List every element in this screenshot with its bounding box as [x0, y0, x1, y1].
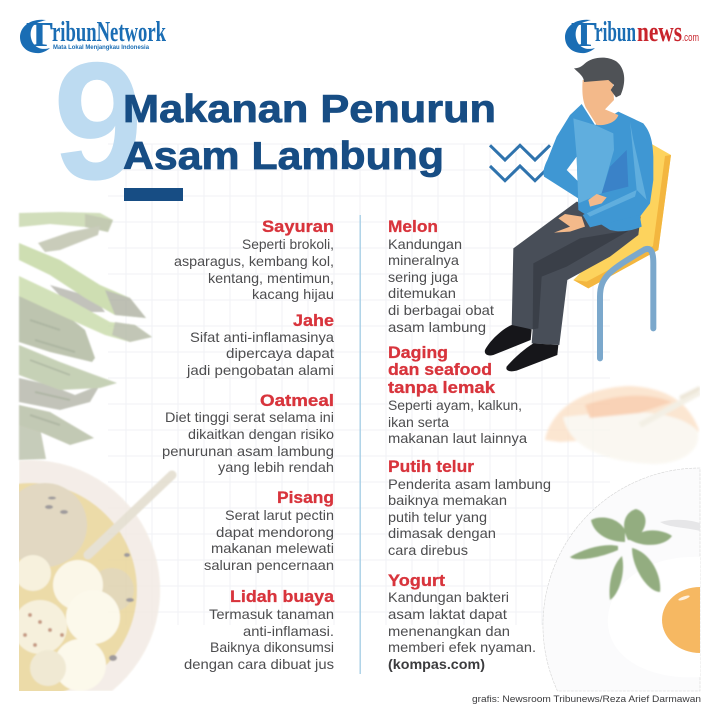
item: Lidah buaya [184, 587, 335, 672]
item: Yogurt: menenangkan dan [388, 623, 510, 639]
big number nine: 9 [53, 27, 143, 215]
column: right foods [388, 217, 551, 672]
logo: Tribunnews: T [571, 15, 597, 54]
title [123, 88, 496, 178]
logo: Tribunnews: .com [682, 32, 699, 44]
item: Jahe [186, 311, 334, 378]
item: Oatmeal: yang lebih rendah [218, 459, 334, 475]
logo: TribunNetwork: T [26, 15, 53, 54]
logo: Tribunnews: ribun [595, 16, 636, 48]
title accent bar [124, 188, 183, 201]
item: Putih telur [388, 457, 551, 558]
item: Pisang: Pisang [277, 488, 334, 507]
column divider [360, 215, 361, 674]
icon: zigzag pain lines [490, 145, 550, 181]
item: Melon: ditemukan [388, 285, 456, 301]
item: Yogurt: Kandungan bakteri [388, 589, 509, 605]
item: Pisang: dapat mendorong [216, 524, 334, 540]
item: Melon [388, 217, 494, 335]
item: Jahe: Jahe [293, 311, 334, 330]
illustration: seated man with stomach ache [485, 58, 671, 371]
item: Daging dan seafood [388, 343, 527, 446]
item: Putih telur: dimasak dengan [388, 525, 496, 541]
item: Lidah buaya: Baiknya dikonsumsi [210, 639, 334, 655]
item: Yogurt [388, 571, 536, 672]
item: Daging dan seafood: makanan laut lainnya [388, 430, 527, 446]
icon: green leaves [570, 509, 672, 600]
photo: fried egg on plate [543, 468, 700, 691]
item: Putih telur: Penderita asam lambung [388, 476, 551, 492]
item: Sayuran: Sayuran [262, 217, 334, 236]
item: Pisang: makanan melewati [211, 540, 334, 556]
item: Melon: di berbagai obat [388, 302, 494, 318]
item: Melon: Melon [388, 217, 438, 236]
item: Lidah buaya: anti-inflamasi. [243, 623, 334, 639]
item: Daging dan seafood: Seperti ayam, kalkun, [388, 397, 522, 413]
item: Putih telur: baiknya memakan [388, 492, 507, 508]
item: Sayuran: kentang, mentimun, [208, 270, 334, 286]
item: Lidah buaya: dengan cara dibuat jus [184, 656, 334, 672]
item: Oatmeal: Oatmeal [260, 391, 334, 410]
item: Melon: Kandungan [388, 236, 462, 252]
credit line: grafis: Newsroom Tribunews/Reza Arief Darmawan [472, 694, 701, 705]
item: Pisang: Serat larut pectin [225, 507, 334, 523]
item: Oatmeal [162, 391, 334, 475]
logo: TribunNetwork: Mata Lokal Menjangkau Indonesia [53, 44, 149, 51]
item: Daging dan seafood: tanpa lemak [388, 378, 496, 397]
item: Daging dan seafood: dan seafood [388, 360, 492, 379]
item: Pisang [204, 488, 334, 573]
item: Melon: mineralnya [388, 252, 459, 268]
logo: TribunNetwork: ribunNetwork [52, 16, 167, 48]
logo: Tribunnews: news [637, 16, 682, 48]
item: Melon: asam lambung [388, 319, 486, 335]
item: Jahe: jadi pengobatan alami [186, 362, 334, 378]
item: Sayuran: asparagus, kembang kol, [174, 253, 334, 269]
item: Sayuran: Seperti brokoli, [242, 236, 334, 252]
item: Putih telur: Putih telur [388, 457, 474, 476]
item: Yogurt: asam laktat dapat [388, 606, 507, 622]
item: Yogurt: memberi efek nyaman. [388, 639, 536, 655]
logo: TribunNetwork [20, 15, 167, 54]
item: Daging dan seafood: ikan serta [388, 414, 449, 430]
item: Lidah buaya: Termasuk tanaman [209, 606, 334, 622]
item: Jahe: dipercaya dapat [226, 345, 334, 361]
item: Sayuran: kacang hijau [252, 286, 334, 302]
photo: oatmeal bowl with banana [19, 460, 177, 691]
item: Lidah buaya: Lidah buaya [230, 587, 335, 606]
item: Oatmeal: Diet tinggi serat selama ini [165, 409, 334, 425]
item: Putih telur: putih telur yang [388, 509, 487, 525]
item: Melon: sering juga [388, 269, 458, 285]
item: Yogurt: Yogurt [388, 571, 445, 590]
item: Oatmeal: dikaitkan dengan risiko [188, 426, 334, 442]
title: Makanan Penurun [123, 88, 496, 131]
item: Jahe: Sifat anti-inflamasinya [190, 329, 334, 345]
item: Putih telur: cara direbus [388, 542, 468, 558]
item: Pisang: saluran pencernaan [204, 557, 334, 573]
item: Oatmeal: penurunan asam lambung [162, 443, 334, 459]
item: Yogurt: (kompas.com) [388, 656, 485, 672]
photo: asparagus [19, 212, 152, 460]
logo: Tribunnews [565, 15, 699, 54]
item: Daging dan seafood: Daging [388, 343, 448, 362]
photo: sushi seafood [545, 386, 700, 464]
title: Asam Lambung [123, 135, 444, 178]
column: left foods [162, 217, 335, 672]
item: Sayuran [174, 217, 334, 302]
